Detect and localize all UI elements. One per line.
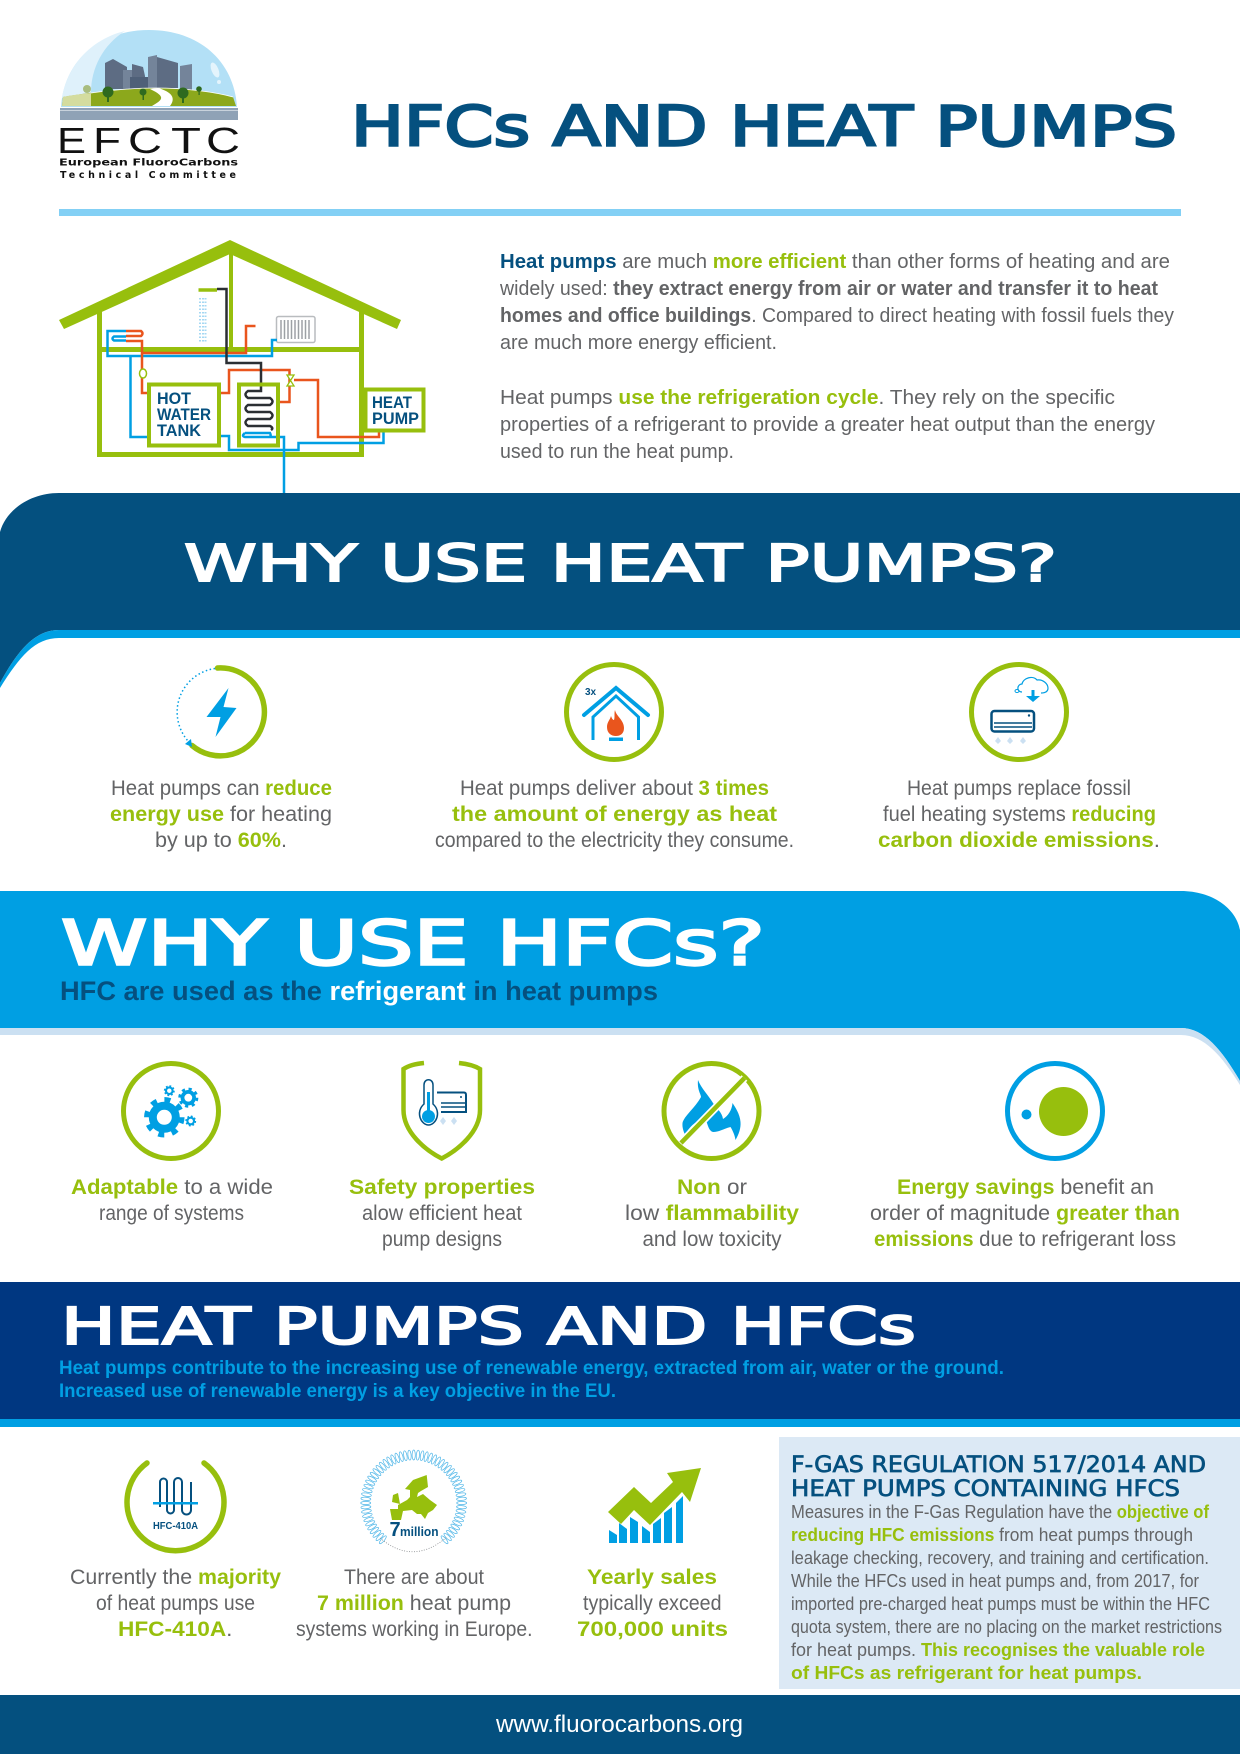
text: seven million [296,1565,532,1641]
intro text: Heat pumps are much more efficient than other forms of heating and are [500,250,1170,273]
heading: HEAT PUMPS AND HFCs [61,1298,916,1357]
text: carbon dioxide: Heat pumps replace fossil [907,776,1131,800]
text: non flammability: low flammability [625,1201,799,1225]
text: three times energy: Heat pumps deliver about 3 times [460,776,769,800]
website: www.fluorocarbons.org [495,1711,743,1738]
band text [59,1357,1004,1402]
text: energy savings: Energy savings benefit an [897,1175,1154,1199]
text: adaptable [71,1175,273,1225]
subheading: HFC are used as the refrigerant in heat pumps [60,976,658,1006]
text: yearly sales [577,1565,728,1641]
pipe: black with heating coil [217,289,272,430]
pump symbol [140,369,146,378]
panel body text: reducing HFC emissions from heat pumps through [791,1524,1193,1545]
text: seven million: systems working in Europe. [296,1617,532,1641]
text: majority: Currently the majority [70,1565,281,1589]
text: carbon dioxide: fuel heating systems reducing [883,802,1156,826]
text: majority: of heat pumps use [96,1591,255,1615]
title: HFCs AND HEAT PUMPS [351,94,1177,158]
hot water tank: HOT [157,389,192,408]
house diagram [59,240,424,493]
valve symbol [287,375,294,386]
logo: EFCTC [57,30,240,181]
icon: house three times: 3x [585,687,597,698]
logo wordmark: C [206,120,240,161]
icon: HFC-410A: HFC-410A [153,1520,198,1532]
text: adaptable: Adaptable to a wide [71,1175,273,1199]
heading: WHY USE HEAT PUMPS? [184,535,1057,594]
logo wordmark: E [57,120,86,161]
text: carbon dioxide [878,776,1160,852]
footer band [0,1695,1240,1754]
panel heading: F-GAS REGULATION 517/2014 AND [791,1452,1206,1478]
text: non flammability: and low toxicity [642,1227,782,1251]
text: reduce energy use: Heat pumps can reduce [111,776,332,800]
text: safety properties [349,1175,535,1251]
icon: safety shield [404,1063,480,1158]
logo subtitle: European FluoroCarbons [59,158,238,168]
heat pump box: HEAT [372,393,413,412]
coil tank [239,384,278,446]
logo subtitle [59,158,238,181]
panel body text: for heat pumps. This recognises the valuable role [791,1639,1205,1660]
intro text: widely used: they extract energy from air or water and transfer it to heat [499,277,1158,300]
logo wordmark: T [171,120,201,161]
text: non flammability [625,1175,799,1251]
panel body text: of HFCs as refrigerant for heat pumps. [791,1662,1142,1683]
panel: why use HFCs band [0,891,1240,1085]
icon: Europe 7 million: 7 [390,1519,401,1541]
house structure [59,240,401,457]
text: safety properties: pump designs [382,1227,502,1251]
icon: HFC-410A [127,1463,224,1551]
panel body text: While the HFCs used in heat pumps and, from 2017, for [791,1570,1199,1591]
intro text: Heat pumps use the refrigeration cycle. They rely on the specific [500,386,1115,409]
intro text [499,250,1175,463]
intro text: homes and office buildings. Compared to direct heating with fossil fuels they [500,304,1175,327]
heading: WHY USE HFCs? [61,908,765,980]
icon: house three times [566,664,662,760]
logo wordmark: F [93,120,121,161]
text: majority: HFC-410A . [118,1617,232,1641]
panel body text: Measures in the F-Gas Regulation have the objective of [791,1501,1210,1522]
panel body text [791,1501,1222,1683]
icon: gears [124,1064,218,1158]
panel: F-gas regulation [779,1437,1240,1689]
panel: heat pumps and HFCs band [0,1282,1240,1427]
panel: why use heat pumps band [0,493,1240,688]
icon: Europe 7 million [361,1450,467,1552]
text: majority [70,1565,281,1641]
text: three times energy: compared to the electricity they consume. [435,828,794,852]
text: safety properties: Safety properties [349,1175,535,1199]
logo wordmark [57,120,240,161]
hot water tank [149,384,219,446]
pipes: orange [126,326,379,437]
band text: Heat pumps contribute to the increasing use of renewable energy, extracted from air, water or the ground. [59,1357,1004,1379]
icon: energy savings circle [1008,1064,1102,1158]
text: adaptable: range of systems [99,1201,244,1225]
icon: energy reduction [177,668,264,756]
shower [198,290,217,342]
radiator [276,316,315,342]
pipes: blue [108,331,384,493]
hot water tank: WATER [157,405,211,424]
text: three times energy [435,776,794,852]
text: safety properties: alow efficient heat [362,1201,522,1225]
band text: Increased use of renewable energy is a key objective in the EU. [59,1380,616,1402]
heat pump box: PUMP [372,409,419,428]
text: yearly sales: typically exceed [583,1591,722,1615]
heat pump box [366,390,424,430]
icon: carbon dioxide reduction [972,664,1066,760]
hot water tank: TANK [157,421,202,440]
text: energy savings: order of magnitude greater than [870,1201,1180,1225]
text: energy savings: emissions due to refrigerant loss [874,1227,1176,1251]
text: reduce energy use [110,776,332,852]
intro text: are much more energy efficient. [500,331,777,354]
text: seven million: There are about [344,1565,484,1589]
logo subtitle: Technical Committee [60,170,236,181]
icon: Europe 7 million: million [400,1524,439,1539]
logo wordmark: C [128,120,162,161]
text: energy savings [870,1175,1180,1251]
intro text: properties of a refrigerant to provide a greater heat output than the energy [500,413,1156,436]
icon: sales chart [608,1468,701,1543]
panel heading: HEAT PUMPS CONTAINING HFCS [791,1476,1180,1502]
text: seven million: 7 million heat pump [317,1591,511,1615]
intro text: used to run the heat pump. [500,440,734,463]
text: three times energy: the amount of energy as heat [452,802,777,826]
text: carbon dioxide: carbon dioxide emissions . [878,828,1160,852]
text: yearly sales: 700,000 units [577,1617,728,1641]
text: yearly sales: Yearly sales [587,1565,717,1589]
text: reduce energy use: energy use for heating [110,802,332,826]
text: reduce energy use: by up to 60%. [155,828,287,852]
text: non flammability: Non or [677,1175,747,1199]
icon: non flammable [664,1064,759,1158]
panel heading [791,1452,1206,1502]
